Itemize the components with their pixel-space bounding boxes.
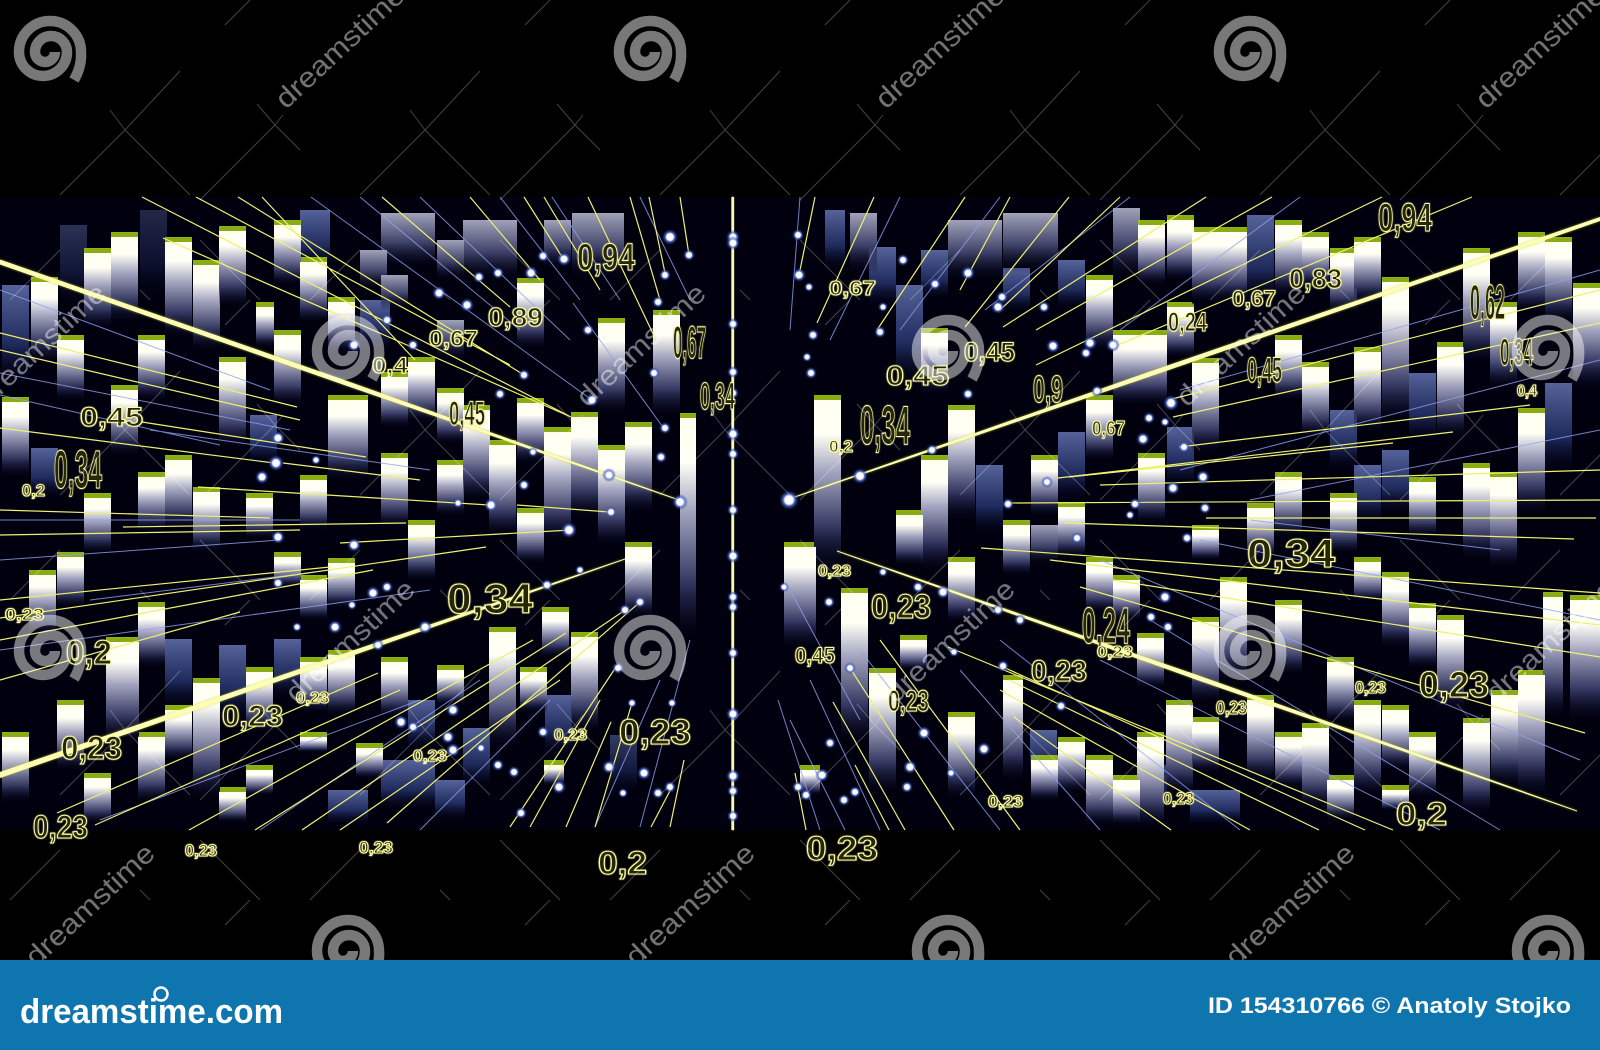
number labels: right panel: 0,45 <box>795 643 835 668</box>
number labels: right panel: 0,67 <box>1232 286 1276 311</box>
number labels: left panel: 0,4 <box>372 353 409 378</box>
watermark: diagonal site name: dreamstime <box>279 573 421 708</box>
number labels: left panel: 0,23 <box>554 727 587 744</box>
left dim blue bars <box>2 210 637 825</box>
number labels: right panel: 0,23 <box>888 685 929 718</box>
right dim blue bars <box>825 208 1572 825</box>
number labels: right panel: 0,62 <box>1470 276 1505 330</box>
number labels: right panel: 0,9 <box>1033 369 1063 411</box>
number labels: left panel: 0,94 <box>577 237 635 279</box>
number labels: left panel: 0,2 <box>66 634 112 672</box>
central vertical axis with nodes <box>726 197 740 830</box>
number labels: right panel: 0,24 <box>1168 307 1207 337</box>
right bright bars <box>784 220 1600 827</box>
number labels: right panel: 0,67 <box>1092 418 1125 440</box>
number labels: left panel: 0,23 <box>296 690 329 707</box>
number labels: right panel: 0,23 <box>1216 698 1247 718</box>
number labels: left panel: 0,67 <box>673 317 706 368</box>
watermark: diagonal site name: dreamstime <box>19 837 161 972</box>
banner brand name: dreamstime.com <box>20 993 283 1031</box>
number labels: left panel: 0,23 <box>413 748 447 765</box>
number labels: right panel: 0,45 <box>964 337 1015 367</box>
number labels: left panel: 0,23 <box>5 605 44 624</box>
number labels: right panel: 0,67 <box>829 278 876 300</box>
number labels: right panel: 0,4 <box>1517 383 1537 400</box>
number labels: left panel: 0,23 <box>61 730 122 766</box>
number labels: right panel: 0,23 <box>1419 664 1489 705</box>
main trend line: lower left <box>0 558 625 778</box>
footer banner <box>0 960 1600 1050</box>
number labels: right panel: 0,23 <box>818 563 851 580</box>
number labels: right panel: 0,45 <box>1247 351 1282 390</box>
left bright bars <box>2 225 696 823</box>
number labels: left panel: 0,23 <box>619 713 691 752</box>
number labels: left panel: 0,45 <box>80 402 143 432</box>
main trend line: lower right <box>837 550 1577 812</box>
glowing data dots: right <box>779 229 1211 806</box>
number labels: right panel: 0,23 <box>988 792 1023 811</box>
number labels: left panel <box>5 237 735 881</box>
number labels: left panel: 0,34 <box>54 440 102 500</box>
watermark: diagonal site name: dreamstime <box>619 837 761 972</box>
number labels: left panel: 0,23 <box>359 838 393 857</box>
watermark: diagonal site name: dreamstime <box>570 277 712 412</box>
number labels: right panel: 0,23 <box>1355 678 1386 697</box>
panel: right perspective bar field <box>784 208 1600 827</box>
panel: chart backdrop <box>0 197 1600 830</box>
panel: left perspective bar field <box>2 210 696 825</box>
image id and credit: ID 154310766 © Anatoly Stojko <box>1208 993 1571 1018</box>
number labels: right panel: 0,2 <box>829 437 853 456</box>
number labels: left panel: 0,89 <box>488 302 543 332</box>
number labels: right panel: 0,23 <box>1163 789 1194 808</box>
number labels: left panel: 0,34 <box>447 575 534 622</box>
main trend line: upper right <box>786 217 1600 500</box>
perspective lines: blue and white fine rays <box>0 197 1600 830</box>
watermark: diagonal site name: dreamstime <box>1219 837 1361 972</box>
number labels: right panel: 0,94 <box>1378 196 1433 240</box>
number labels: right panel: 0,23 <box>1097 644 1133 661</box>
main trend line: upper left <box>0 260 679 500</box>
number labels: right panel: 0,23 <box>806 830 878 868</box>
number labels: right panel: 0,34 <box>860 394 910 456</box>
number labels: left panel: 0,23 <box>33 809 88 845</box>
text: 0,34 <box>700 376 735 418</box>
number labels: left panel: 0,45 <box>449 395 485 433</box>
number labels: right panel: 0,34 <box>1247 532 1336 576</box>
glowing data dots: left <box>255 229 695 819</box>
number labels: left panel: 0,2 <box>22 481 45 500</box>
watermark: diagonal site name: dreamstime <box>1170 277 1312 412</box>
icon: small spiral in banner <box>154 988 168 1000</box>
number labels: left panel: 0,2 <box>598 845 647 881</box>
perspective lines: yellow rays <box>0 197 1600 830</box>
number labels: left panel: 0,67 <box>429 326 478 351</box>
number labels: right panel: 0,2 <box>1396 796 1447 832</box>
number labels: left panel: 0,23 <box>222 700 283 733</box>
number labels: right panel: 0,23 <box>871 588 931 626</box>
number labels: right panel: 0,34 <box>1500 332 1533 374</box>
watermark: diagonal site name: dreamstime <box>879 573 1021 708</box>
number labels: right panel: 0,83 <box>1289 263 1342 294</box>
number labels: left panel: 0,23 <box>185 841 217 860</box>
number labels: right panel: 0,24 <box>1082 597 1130 654</box>
number labels: right panel <box>795 196 1537 868</box>
number labels: right panel: 0,45 <box>886 360 949 391</box>
number labels: right panel: 0,23 <box>1031 655 1087 688</box>
